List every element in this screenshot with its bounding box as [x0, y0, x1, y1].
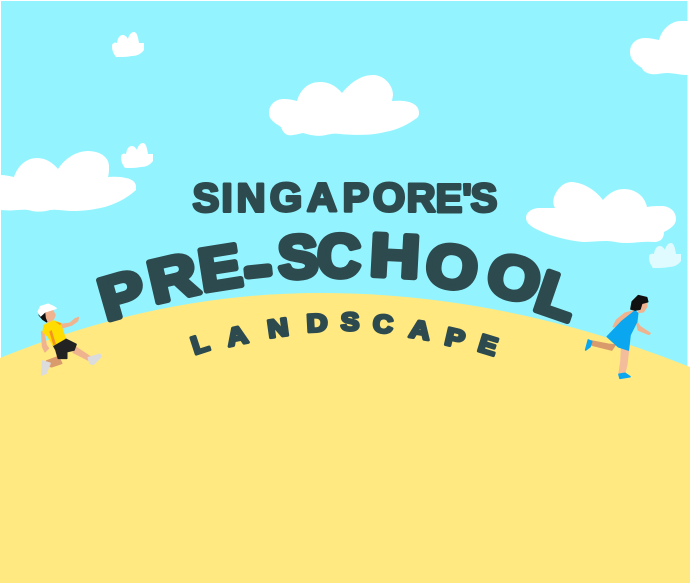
cloud: right [526, 182, 676, 243]
figure: running girl [586, 296, 650, 378]
title: PRE-SCHOOL: P [91, 257, 153, 334]
title: LANDSCAPE: P [442, 322, 467, 354]
title: SINGAPORE'S: E [436, 177, 462, 221]
title: SINGAPORE'S: S [471, 176, 497, 220]
title: PRE-SCHOOL: L [527, 258, 587, 335]
cloud: top right [630, 21, 688, 75]
title: SINGAPORE'S: G [270, 175, 302, 220]
title: PRE-SCHOOL: O [480, 239, 547, 317]
title: LANDSCAPE: A [224, 320, 250, 352]
title: LANDSCAPE: C [372, 309, 394, 339]
title: LANDSCAPE: L [188, 328, 212, 360]
title: PRE-SCHOOL [91, 220, 587, 335]
title: SINGAPORE'S: I [221, 176, 233, 220]
title: LANDSCAPE: S [341, 308, 359, 336]
title: PRE-SCHOOL: R [142, 240, 204, 316]
cloud: small middle [121, 143, 153, 168]
title: PRE-SCHOOL: E [194, 232, 246, 305]
title: PRE-SCHOOL: H [368, 220, 422, 291]
cloud: pale right [649, 243, 681, 268]
title: SINGAPORE'S [193, 175, 497, 221]
title: SINGAPORE'S: O [373, 175, 405, 220]
title: SINGAPORE'S: P [343, 176, 369, 220]
cloud: small top [112, 32, 144, 57]
title: LANDSCAPE [188, 308, 501, 361]
cloud: large center [269, 75, 419, 136]
title: SINGAPORE'S: R [407, 176, 436, 220]
title: PRE-SCHOOL: C [317, 222, 361, 290]
title: LANDSCAPE: A [408, 315, 432, 346]
title: PRE-SCHOOL: O [421, 231, 482, 304]
title: LANDSCAPE: D [306, 309, 328, 338]
figure: running boy [38, 304, 101, 375]
title: SINGAPORE'S: N [237, 176, 265, 220]
title: SINGAPORE'S: A [307, 175, 337, 220]
title: PRE-SCHOOL: S [276, 222, 320, 292]
title: SINGAPORE'S: S [193, 176, 219, 220]
sky background [1, 1, 688, 401]
title: SINGAPORE'S: ' [462, 177, 472, 221]
title: LANDSCAPE: N [266, 313, 290, 343]
cloud: large left [0, 151, 136, 212]
hill [0, 293, 690, 583]
title: PRE-SCHOOL: - [241, 232, 274, 301]
title: LANDSCAPE: E [475, 329, 501, 361]
